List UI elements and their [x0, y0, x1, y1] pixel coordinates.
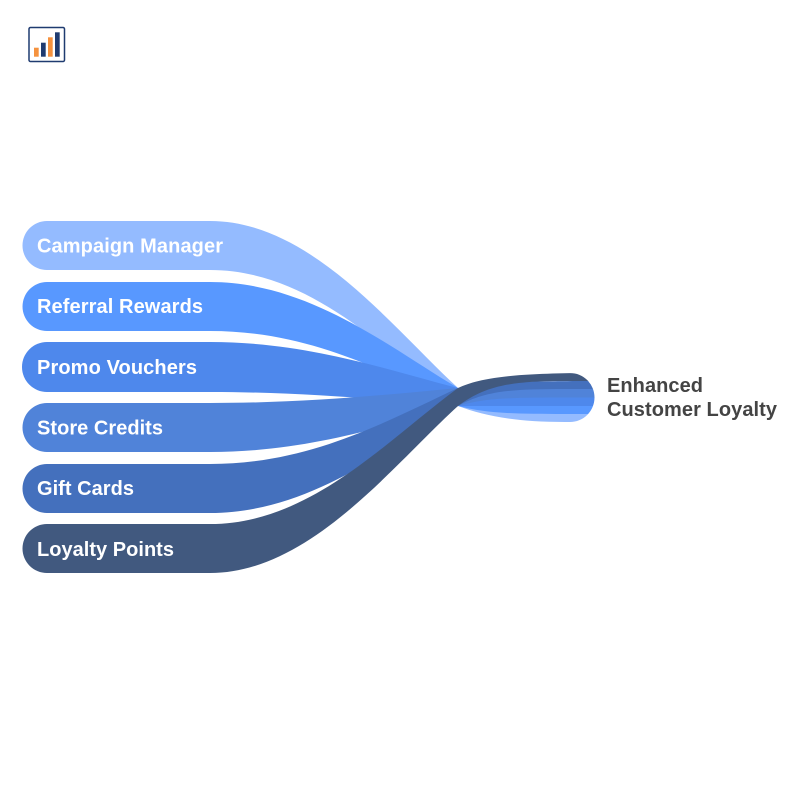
- label: Promo Vouchers: Promo Vouchers: [37, 357, 197, 379]
- outcome label: Enhanced Customer Loyalty: Customer Loyalty: [607, 399, 778, 421]
- label: Store Credits: Store Credits: [37, 418, 163, 440]
- label: Loyalty Points: Loyalty Points: [37, 539, 174, 561]
- ribbon: Gift Cards: [22, 381, 596, 513]
- icon: bar chart logo: [29, 28, 64, 62]
- label: Campaign Manager: Campaign Manager: [37, 236, 223, 258]
- infographic canvas: [22, 26, 777, 573]
- ribbon: Promo Vouchers: [22, 342, 596, 406]
- ribbon: Loyalty Points: [22, 373, 596, 573]
- outcome label: Enhanced Customer Loyalty: [607, 375, 778, 421]
- sankey ribbons: [22, 221, 596, 573]
- ribbon: Store Credits: [22, 388, 596, 452]
- label: Referral Rewards: Referral Rewards: [37, 296, 203, 318]
- label: Gift Cards: Gift Cards: [37, 478, 134, 500]
- ribbon: Campaign Manager: [22, 221, 596, 422]
- ribbon: Referral Rewards: [23, 282, 596, 414]
- outcome label: Enhanced Customer Loyalty: Enhanced: [607, 375, 703, 397]
